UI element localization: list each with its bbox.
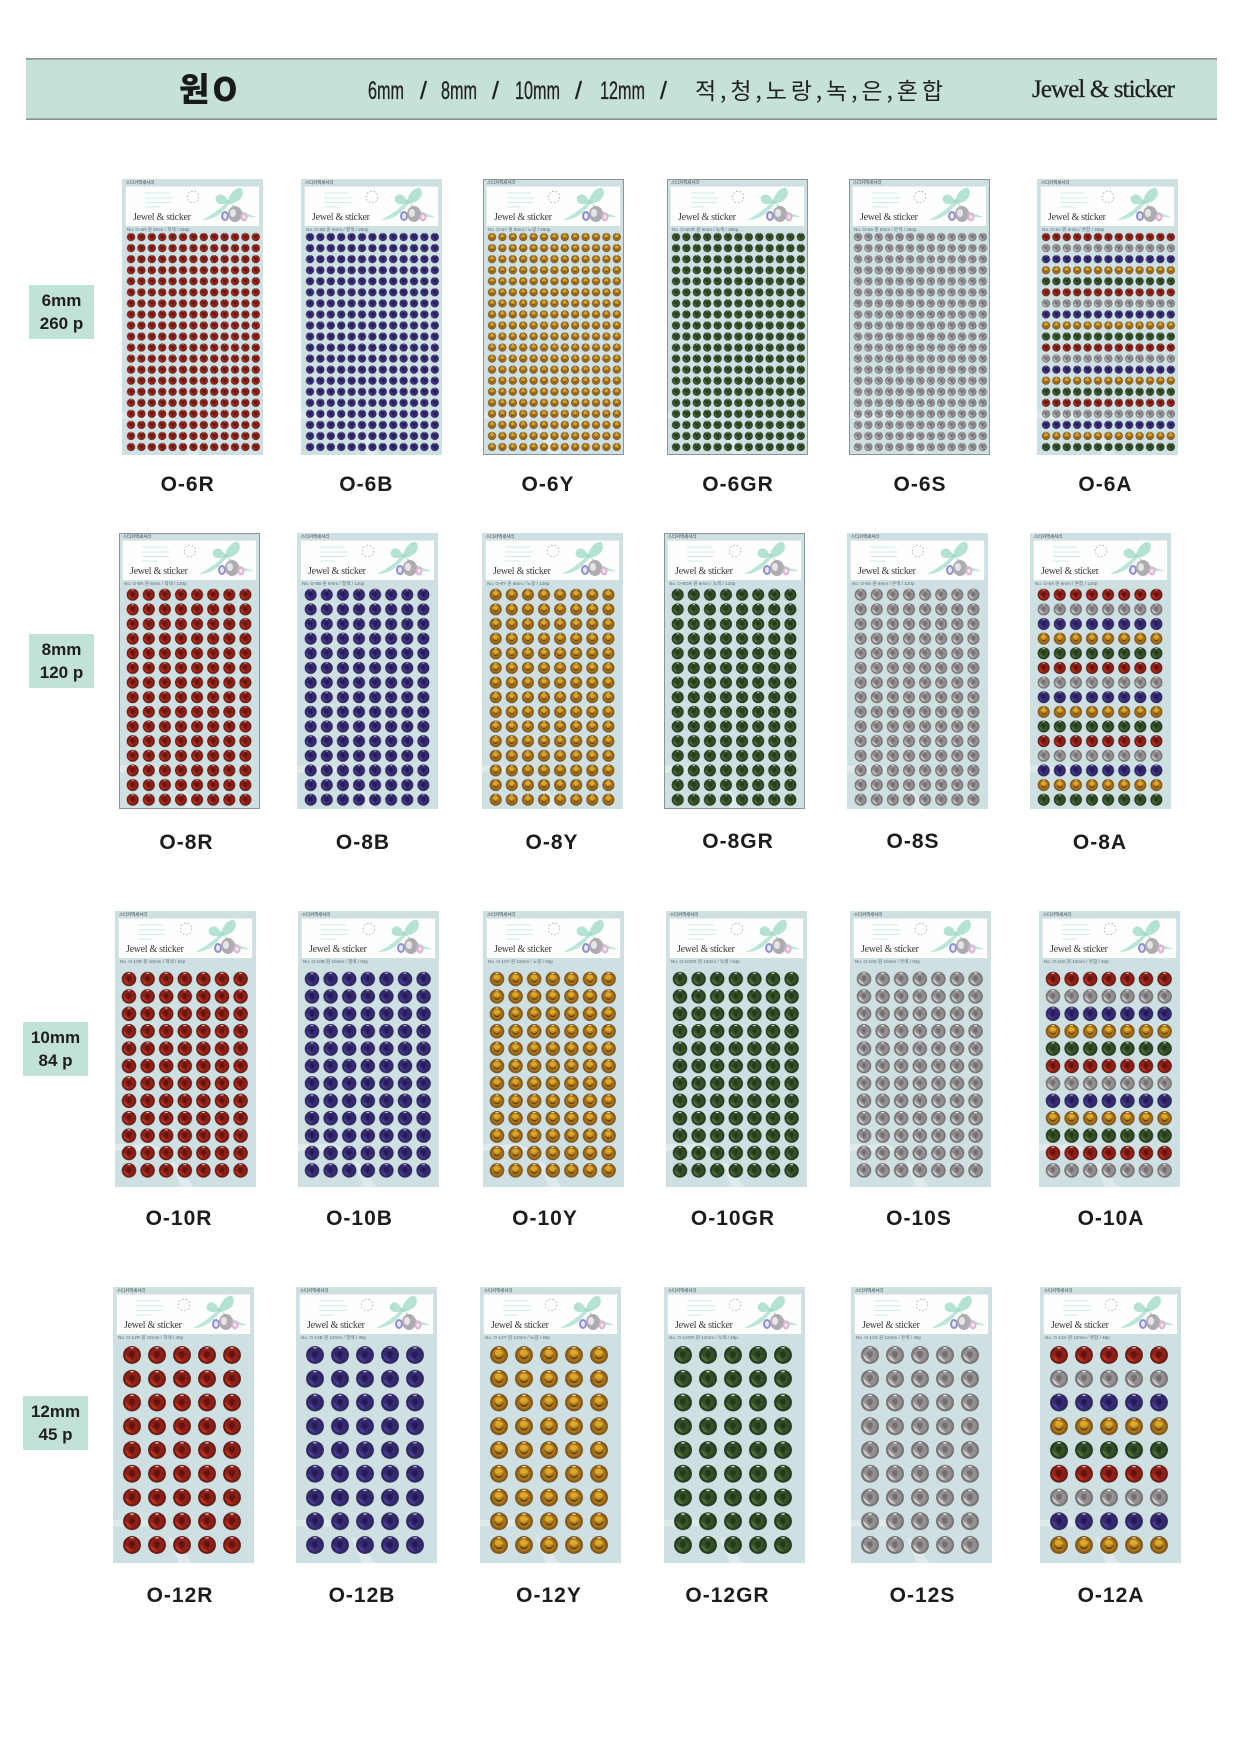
sheet: O-10GR: 스티커액세서리 [670,911,698,918]
caption: O-12GR: O-12GR [685,1584,770,1607]
sheet: O-8S [847,533,988,809]
sheet: O-10R [115,911,256,1187]
sheet: O-12R: Jewel & sticker [124,1320,183,1331]
sheet: O-8S: No. O-8S 원 8mm / 은색 / 120p [852,580,915,587]
sheet: O-12B: Jewel & sticker [307,1320,366,1331]
caption: O-12B: O-12B [329,1584,395,1607]
sheet: O-8GR [664,533,805,809]
sheet: O-10B: Jewel & sticker [309,944,368,955]
sheet: O-10R: Jewel & sticker [126,944,185,955]
sheet: O-12Y: No. O-12Y 원 12mm / 노랑 / 45p [485,1334,550,1340]
gem rows [1046,1343,1172,1557]
sheet: O-6GR: Jewel & sticker [678,212,737,223]
sheet: O-12Y: 스티커액세서리 [484,1287,512,1294]
sheet: O-10Y: 스티커액세서리 [487,911,515,918]
sheet: O-6S [849,179,990,455]
sizes [368,77,667,105]
sheet: O-10R: 스티커액세서리 [119,911,148,918]
sheet: O-10GR: No. O-10GR 원 10mm / 녹색 / 84p [671,958,740,965]
caption: O-8Y: O-8Y [525,831,579,854]
sheet: O-12A: 스티커액세서리 [1044,1287,1072,1294]
sheet: O-8B: 스티커액세서리 [301,533,329,540]
sheet: O-12A: Jewel & sticker [1051,1320,1110,1331]
sheet: O-8A [1030,533,1171,809]
sheet: O-12GR: Jewel & sticker [674,1320,733,1331]
size label: 8mm: 8mm [42,640,81,659]
sheet: O-6B: 스티커액세서리 [304,179,333,186]
caption: O-10R: O-10R [146,1207,212,1230]
sheet: O-6R: Jewel & sticker [133,212,192,223]
sheet: O-12R: No. O-12R 원 12mm / 적색 / 45p [118,1334,184,1341]
sheet: O-12S: 스티커액세서리 [855,1287,883,1294]
sheet: O-12GR [664,1287,805,1563]
sizes: / [420,77,427,105]
sheet: O-12S: Jewel & sticker [862,1320,921,1331]
sheet: O-6A: Jewel & sticker [1048,212,1107,223]
gem rows [1036,587,1164,807]
caption: O-12R: O-12R [147,1584,213,1607]
sheet: O-6GR: No. O-6GR 원 6mm / 녹색 / 260p [672,226,739,233]
caption: O-8R: O-8R [159,831,214,854]
sheet: O-12R: 스티커액세서리 [117,1287,145,1294]
size label: 12mm: 45 p [38,1425,73,1444]
caption: O-12A: O-12A [1078,1584,1144,1607]
sheet: O-6S: Jewel & sticker [860,212,919,223]
sizes: / [575,77,582,105]
caption: O-8GR: O-8GR [702,830,774,853]
caption: O-6B: O-6B [339,473,393,496]
caption: O-10B: O-10B [326,1207,393,1230]
caption: O-6GR: O-6GR [702,473,774,496]
sheet: O-10S: Jewel & sticker [861,944,920,955]
sheet: O-8S: 스티커액세서리 [851,533,879,540]
sheet: O-12S: No. O-12S 원 12mm / 은색 / 45p [856,1334,921,1341]
sheet: O-10B [298,911,439,1187]
sheet: O-8A: 스티커액세서리 [1034,533,1062,540]
sheet: O-8B [297,533,438,809]
caption: O-6Y: O-6Y [521,473,575,496]
sheet: O-12B [296,1287,437,1563]
caption: O-12Y: O-12Y [516,1584,582,1607]
sheet: O-8Y: 스티커액세서리 [486,533,514,540]
size label: 6mm: 260 p [40,314,83,333]
caption: O-10GR: O-10GR [691,1207,775,1230]
sheet: O-12GR: 스티커액세서리 [668,1287,696,1294]
size label: 10mm [23,1022,88,1076]
sheet: O-8R [119,533,260,809]
sheet: O-12A: No. O-12A 원 12mm / 혼합 / 45p [1045,1334,1110,1340]
gem rows [1044,970,1174,1179]
sheet: O-6S: No. O-6S 원 6mm / 은색 / 260p [854,226,917,233]
sheet: O-6GR [667,179,808,455]
sheet: O-8R: 스티커액세서리 [123,533,151,540]
sizes: 8mm [441,77,477,105]
size label: 8mm: 120 p [40,663,83,682]
sheet: O-6B [301,179,442,455]
sheet: O-10GR: Jewel & sticker [677,944,736,955]
sheet: O-8Y: No. O-8Y 원 8mm / 노랑 / 120p [486,580,549,586]
sheet: O-10R: No. O-10R 원 10mm / 적색 / 84p [120,958,186,965]
sheet: O-6Y [483,179,624,455]
caption: O-6R: O-6R [161,473,215,496]
gem rows [1041,231,1176,452]
sheet: O-8S: Jewel & sticker [858,566,917,577]
sheet: O-10Y [483,911,624,1187]
sheet: O-10A [1039,911,1180,1187]
sheet: O-6A [1037,179,1178,455]
sheet: O-6A: 스티커액세서리 [1041,179,1069,186]
sheet: O-10S [850,911,991,1187]
sizes: 12mm [600,77,645,105]
sheet: O-12B: 스티커액세서리 [300,1287,328,1294]
sheet: O-6GR: 스티커액세서리 [671,179,699,186]
sheet: O-10S: No. O-10S 원 10mm / 은색 / 84p [855,958,920,965]
sheet: O-8R: No. O-8R 원 8mm / 적색 / 120p [124,580,187,587]
colours: 적,청,노랑,녹,은,혼합 [695,72,943,106]
heading: product name: 원O [179,63,238,111]
caption: O-10S: O-10S [886,1207,952,1230]
sheet: O-6S: 스티커액세서리 [853,179,881,186]
sheet: O-6R: 스티커액세서리 [126,179,154,186]
sheet: O-12GR: No. O-12GR 원 12mm / 녹색 / 45p [668,1334,738,1341]
sheet: O-12R [113,1287,254,1563]
sheet: O-10S: 스티커액세서리 [854,911,882,918]
sizes: / [492,77,499,105]
sheet: O-10GR [666,911,807,1187]
sheet: O-10A: 스티커액세서리 [1043,911,1071,918]
caption: O-6A: O-6A [1078,473,1133,496]
caption: O-10A: O-10A [1078,1207,1144,1230]
sheet: O-6R: No. O-6R 원 6mm / 적색 / 260p [127,226,190,233]
caption: O-10Y: O-10Y [512,1207,578,1230]
sizes: / [660,77,667,105]
sizes: 6mm [368,77,404,105]
sheet: O-12Y [480,1287,621,1563]
size label: 12mm [23,1396,88,1450]
sheet: O-8B: Jewel & sticker [308,566,367,577]
sheet: O-8A: Jewel & sticker [1041,566,1100,577]
size label: 8mm [29,634,94,688]
sheet: O-10B: 스티커액세서리 [302,911,330,918]
sheet: O-6Y: Jewel & sticker [494,212,552,223]
sheet: O-8Y: Jewel & sticker [492,566,551,577]
sheet: O-6Y: 스티커액세서리 [487,179,515,186]
sheet: O-8GR: No. O-8GR 원 8mm / 녹색 / 120p [668,580,735,587]
sheet: O-12B: No. O-12B 원 12mm / 청색 / 45p [301,1334,366,1341]
sizes: 10mm [515,77,560,105]
sheet: O-8GR: 스티커액세서리 [668,533,696,540]
caption: O-8A: O-8A [1073,831,1127,854]
sheet: O-12S [851,1287,992,1563]
sheet: O-10Y: No. O-10Y 원 10mm / 노랑 / 84p [488,958,553,964]
sheet: O-8A: No. O-8A 원 8mm / 혼합 / 120p [1035,580,1098,586]
sheet: O-8R: Jewel & sticker [130,566,189,577]
caption: O-12S: O-12S [890,1584,955,1607]
size label: 6mm [29,285,94,339]
sheet: O-10A: Jewel & sticker [1050,944,1109,955]
size label: 10mm: 10mm [31,1028,80,1047]
sheet: O-8Y [482,533,623,809]
sheet: O-8GR: Jewel & sticker [674,566,733,577]
size label: 10mm: 84 p [38,1051,73,1070]
size label: 6mm: 6mm [42,291,81,310]
sheet: O-10A: No. O-10A 원 10mm / 혼합 / 84p [1044,958,1109,964]
sheet: O-8B: No. O-8B 원 8mm / 청색 / 120p [302,580,365,587]
caption: O-8S: O-8S [886,830,940,853]
sheet: O-12A [1040,1287,1181,1563]
sheet: O-10B: No. O-10B 원 10mm / 청색 / 84p [303,958,368,965]
sheet: O-6B: No. O-6B 원 6mm / 청색 / 260p [306,226,368,233]
caption: O-6S: O-6S [893,473,947,496]
size label: 12mm: 12mm [31,1402,80,1421]
sheet: O-6B: Jewel & sticker [312,212,370,223]
sheet: O-12Y: Jewel & sticker [491,1320,550,1331]
sheet: O-6R [122,179,263,455]
brand: Jewel & sticker [1032,76,1176,103]
sheet: O-10Y: Jewel & sticker [494,944,552,955]
sheet: O-6A: No. O-6A 원 6mm / 혼합 / 260p [1042,226,1105,232]
caption: O-8B: O-8B [336,831,390,854]
sheet: O-6Y: No. O-6Y 원 6mm / 노랑 / 260p [488,226,550,232]
title banner [26,58,1217,120]
